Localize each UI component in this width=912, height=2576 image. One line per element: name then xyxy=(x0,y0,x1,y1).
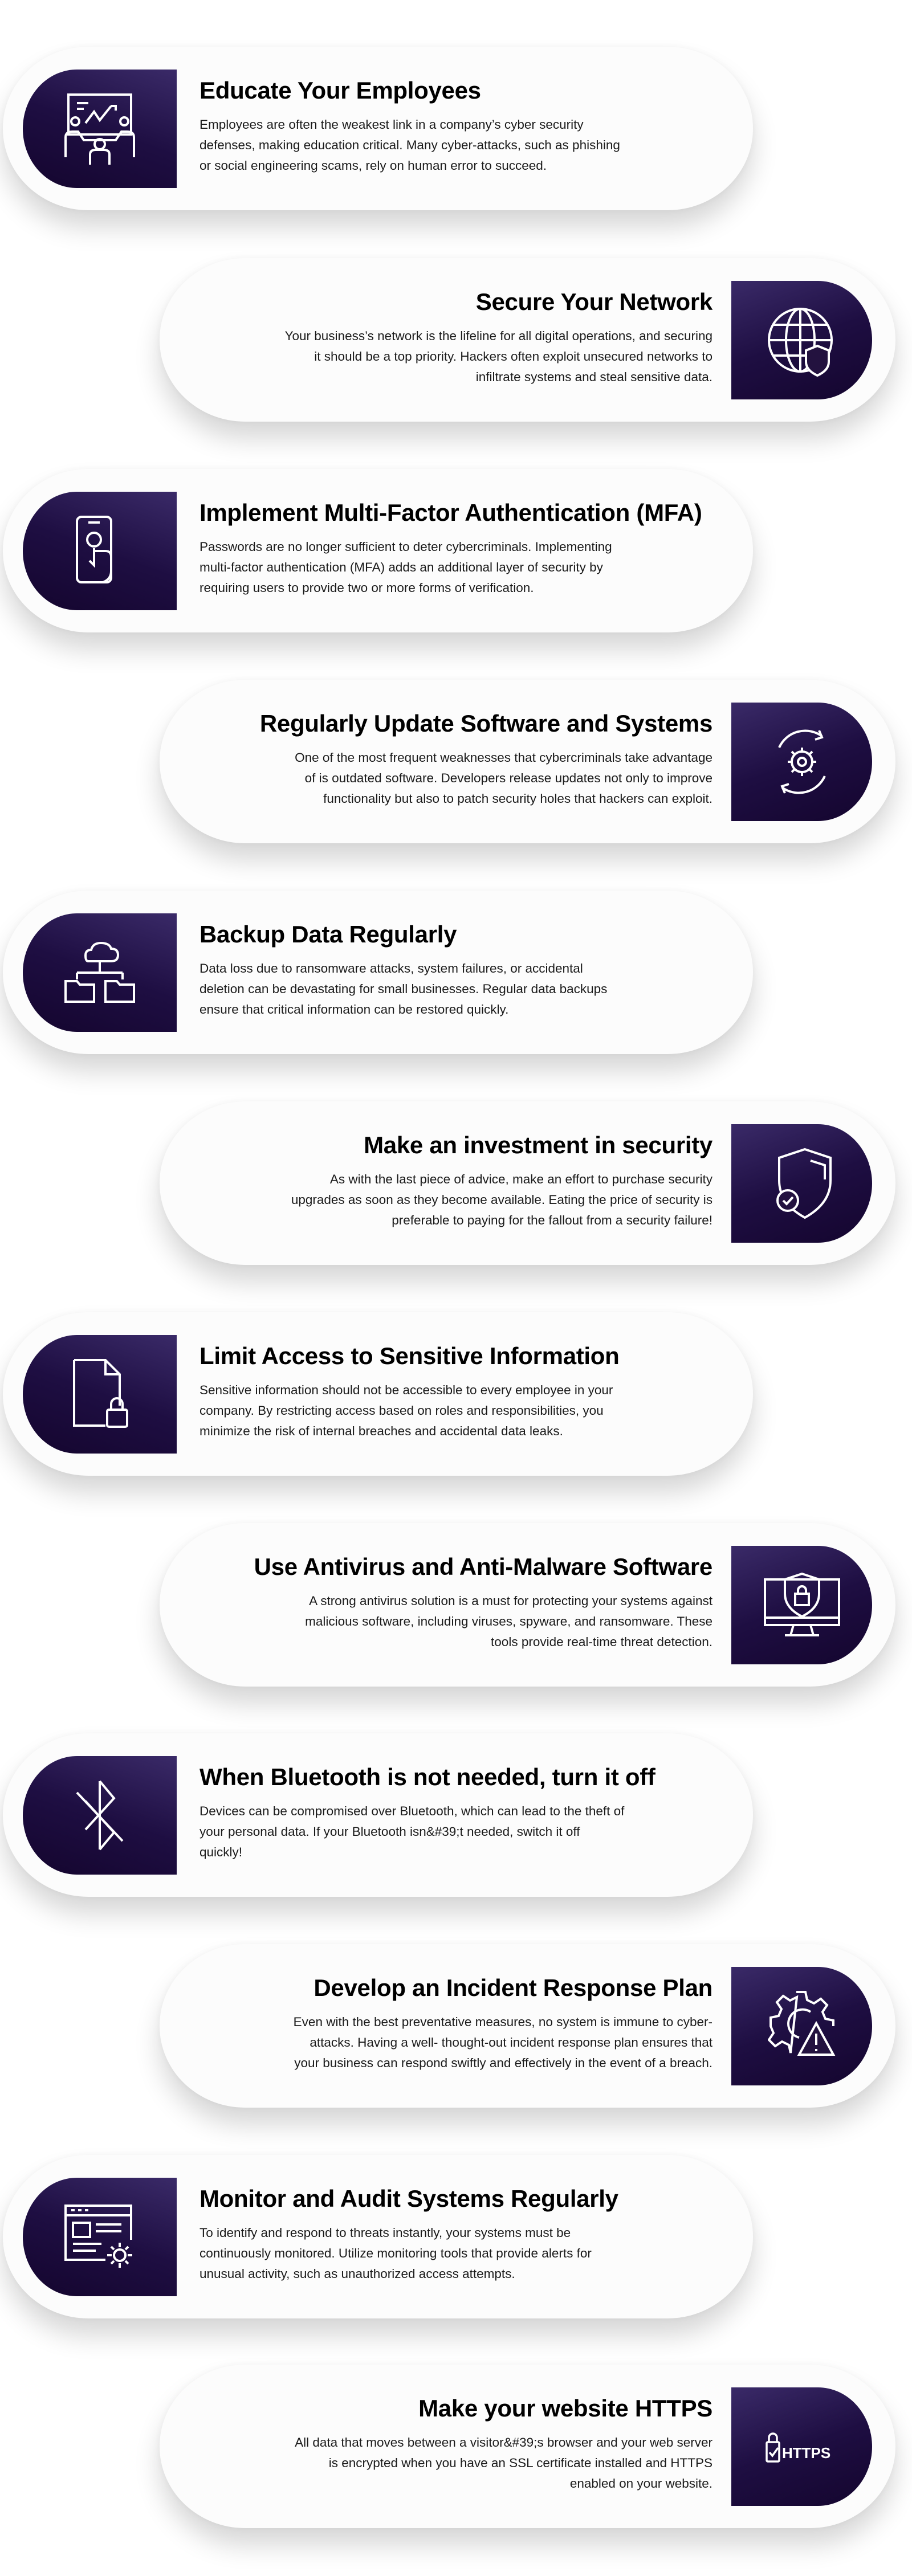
text: Make an investment in security xyxy=(364,1132,712,1158)
text: One of the most frequent weaknesses that cybercriminals take advantage xyxy=(295,750,712,765)
card: update software xyxy=(160,680,895,843)
text: Backup Data Regularly xyxy=(199,921,457,948)
card: bluetooth xyxy=(3,1733,753,1897)
text: Even with the best preventative measures, no system is immune to cyber- xyxy=(294,2015,712,2029)
text: infiltrate systems and steal sensitive data. xyxy=(476,370,712,384)
card: limit access xyxy=(3,1312,753,1476)
card: https xyxy=(160,2365,895,2528)
card: incident response xyxy=(160,1944,895,2108)
text: Your business’s network is the lifeline for all digital operations, and securing xyxy=(285,329,712,343)
card: secure network xyxy=(160,258,895,422)
text: unusual activity, such as unauthorized access attempts. xyxy=(199,2267,515,2281)
card: invest in security xyxy=(160,1101,895,1265)
icon: monitor shield xyxy=(731,1546,872,1664)
text: enabled on your website. xyxy=(570,2476,712,2491)
text: quickly! xyxy=(199,1845,242,1859)
text: Sensitive information should not be accessible to every employee in your xyxy=(199,1383,613,1397)
icon: gear warning xyxy=(731,1967,872,2085)
text: your personal data. If your Bluetooth isn&#39;t needed, switch it off xyxy=(199,1824,580,1839)
card: MFA xyxy=(3,469,753,632)
text: malicious software, including viruses, spyware, and ransomware. These xyxy=(305,1614,712,1628)
icon: https lock xyxy=(731,2387,872,2506)
icon: phone touch xyxy=(23,492,177,610)
icon: https lock: HTTPS xyxy=(782,2444,830,2461)
text: preferable to paying for the fallout from a security failure! xyxy=(392,1213,712,1227)
text xyxy=(199,2185,618,2281)
text: Educate Your Employees xyxy=(199,77,481,104)
text: of is outdated software. Developers release updates not only to improve xyxy=(305,771,712,785)
icon: cloud folders xyxy=(23,913,177,1032)
text xyxy=(199,77,620,173)
text: tools provide real-time threat detection. xyxy=(491,1635,712,1649)
text: All data that moves between a visitor&#39;s browser and your web server xyxy=(295,2435,712,2450)
text: Implement Multi-Factor Authentication (MFA) xyxy=(199,499,702,526)
text: continuously monitored. Utilize monitoring tools that provide alerts for xyxy=(199,2246,592,2260)
text: minimize the risk of internal breaches and accidental data leaks. xyxy=(199,1424,563,1438)
card: backup xyxy=(3,891,753,1054)
text: Monitor and Audit Systems Regularly xyxy=(199,2185,618,2212)
text: Regularly Update Software and Systems xyxy=(260,710,712,737)
icon: browser gear xyxy=(23,2178,177,2296)
icon: gear refresh xyxy=(731,703,872,821)
card: antivirus xyxy=(160,1523,895,1687)
text: it should be a top priority. Hackers often exploit unsecured networks to xyxy=(314,349,712,364)
text: A strong antivirus solution is a must for protecting your systems against xyxy=(309,1594,712,1608)
text: Limit Access to Sensitive Information xyxy=(199,1342,620,1369)
text: defenses, making education critical. Many cyber-attacks, such as phishing xyxy=(199,138,620,152)
text: multi-factor authentication (MFA) adds an additional layer of security by xyxy=(199,560,603,574)
icon: globe shield xyxy=(731,281,872,399)
text: company. By restricting access based on roles and responsibilities, you xyxy=(199,1403,604,1418)
text: Secure Your Network xyxy=(476,288,712,315)
icon: file lock xyxy=(23,1335,177,1454)
text xyxy=(199,921,607,1016)
text: deletion can be devastating for small businesses. Regular data backups xyxy=(199,982,607,996)
text xyxy=(199,499,702,595)
icon: training xyxy=(23,70,177,188)
text: requiring users to provide two or more forms of verification. xyxy=(199,581,534,595)
text: ensure that critical information can be restored quickly. xyxy=(199,1002,508,1016)
text xyxy=(291,1132,712,1227)
text xyxy=(294,1974,712,2070)
text: As with the last piece of advice, make an effort to purchase security xyxy=(330,1172,712,1186)
icon: shield check xyxy=(731,1124,872,1243)
text: To identify and respond to threats instantly, your systems must be xyxy=(199,2226,571,2240)
text: your business can respond swiftly and effectively in the event of a breach. xyxy=(294,2056,712,2070)
text xyxy=(285,288,712,384)
text: Devices can be compromised over Bluetooth, which can lead to the theft of xyxy=(199,1804,624,1818)
text: When Bluetooth is not needed, turn it off xyxy=(199,1763,656,1790)
text: Passwords are no longer sufficient to deter cybercriminals. Implementing xyxy=(199,540,612,554)
text: functionality but also to patch security holes that hackers can exploit. xyxy=(323,791,712,806)
text: or social engineering scams, rely on human error to succeed. xyxy=(199,158,547,173)
text: is encrypted when you have an SSL certificate installed and HTTPS xyxy=(329,2456,712,2470)
card: monitor audit xyxy=(3,2155,753,2318)
text: Employees are often the weakest link in a company’s cyber security xyxy=(199,117,584,132)
text xyxy=(199,1342,620,1438)
icon: bluetooth off xyxy=(23,1756,177,1875)
text xyxy=(254,1553,712,1649)
card: educate employees xyxy=(3,47,753,210)
text xyxy=(260,710,712,806)
text: upgrades as soon as they become available. Eating the price of security is xyxy=(291,1193,712,1207)
text: Make your website HTTPS xyxy=(418,2395,712,2422)
text xyxy=(199,1763,656,1859)
text xyxy=(295,2395,712,2491)
text: Develop an Incident Response Plan xyxy=(314,1974,712,2001)
text: Use Antivirus and Anti-Malware Software xyxy=(254,1553,712,1580)
text: attacks. Having a well- thought-out incident response plan ensures that xyxy=(310,2035,712,2050)
text: Data loss due to ransomware attacks, system failures, or accidental xyxy=(199,961,583,975)
